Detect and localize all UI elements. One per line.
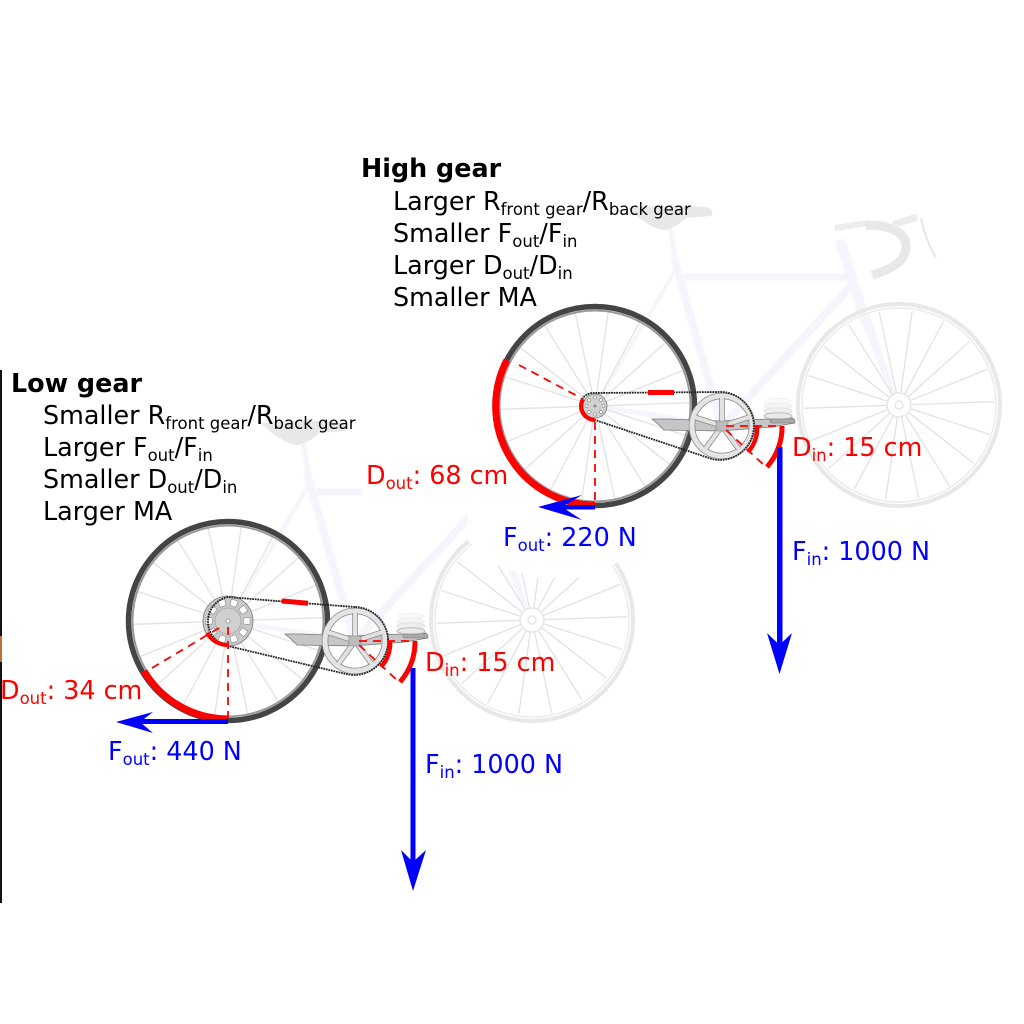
low gear output force arrow — [116, 712, 228, 733]
text block: low gear properties — [43, 400, 356, 526]
label: low gear D out: D — [0, 675, 20, 705]
high gear rear wheel — [496, 306, 694, 506]
label: high gear D out: out — [386, 474, 413, 493]
text block: low gear properties: out — [167, 478, 195, 497]
text block: low gear properties: Larger MA — [43, 496, 173, 526]
label: low gear F out: : 440 N — [150, 736, 242, 766]
text block: low gear properties: in — [222, 478, 237, 497]
label: high gear D out: D — [366, 460, 386, 490]
cover hiding the upper part of the low gear front wheel — [357, 430, 660, 578]
label: high gear F in: in — [807, 550, 822, 569]
high gear chain red mark — [648, 390, 674, 395]
high gear bike frame and front wheel — [595, 206, 1000, 506]
heading: low gear: Low gear — [11, 368, 142, 398]
high gear rear cog — [583, 394, 607, 418]
high gear rear wheel arcs — [496, 360, 595, 505]
label: low gear F in: in — [440, 763, 455, 782]
label: high gear D in: : 15 cm — [827, 432, 922, 462]
text block: high gear properties: /D — [530, 250, 558, 280]
label: high gear F in: F — [792, 536, 807, 566]
high gear chain — [580, 392, 754, 460]
high gear pedal distance marks — [726, 426, 782, 467]
text block: high gear properties: Larger R — [393, 186, 501, 216]
label: low gear F out: F — [108, 736, 123, 766]
label: low gear D out: out — [20, 689, 47, 708]
label: low gear D in: : 15 cm — [460, 647, 555, 677]
high gear bicycle — [496, 206, 1000, 674]
label: high gear D in: in — [812, 446, 827, 465]
low gear crankset — [285, 611, 428, 671]
low gear rear wheel arcs — [144, 633, 228, 719]
text block: low gear properties: /D — [194, 464, 222, 494]
text block: low gear properties: front gear — [165, 414, 248, 433]
label: high gear F in: : 1000 N — [822, 536, 930, 566]
label: high gear F out: : 220 N — [545, 522, 637, 552]
label: low gear D in: in — [445, 661, 460, 680]
label: high gear F out: F — [503, 522, 518, 552]
low gear rear distance dashes — [152, 625, 228, 718]
heading: high gear: High gear — [361, 153, 502, 183]
text block: high gear properties — [393, 186, 691, 312]
text block: high gear properties: /R — [583, 186, 609, 216]
text block: high gear properties: in — [562, 232, 578, 251]
low gear chain — [208, 597, 388, 675]
text block: low gear properties: out — [148, 446, 175, 465]
low gear bike frame and front wheel — [228, 421, 633, 721]
text block: low gear properties: back gear — [274, 414, 356, 433]
low gear chain red mark — [282, 601, 308, 603]
text block: high gear properties: front gear — [501, 200, 583, 219]
label: low gear D out: : 34 cm — [47, 675, 142, 705]
low gear rear wheel — [128, 522, 328, 720]
text block: low gear properties: in — [198, 446, 213, 465]
text block: high gear properties: Smaller F — [393, 218, 512, 248]
label: low gear F in: F — [425, 749, 440, 779]
label: high gear F out: out — [518, 536, 545, 555]
high gear crankset — [652, 396, 795, 456]
text block: low gear properties: /R — [247, 400, 274, 430]
text block: high gear properties: back gear — [609, 200, 691, 219]
text block: high gear properties: out — [502, 264, 530, 283]
text block: high gear properties: out — [512, 232, 540, 251]
text block: high gear properties: Larger D — [393, 250, 502, 280]
text block: high gear properties: Smaller MA — [393, 282, 538, 312]
low gear pedal distance marks — [359, 641, 415, 682]
text block: high gear properties: /F — [539, 218, 562, 248]
low gear input force arrow — [401, 668, 426, 891]
label: high gear D in: D — [792, 432, 812, 462]
low gear bicycle — [116, 421, 660, 891]
high gear input force arrow — [767, 447, 792, 674]
label: low gear F in: : 1000 N — [455, 749, 563, 779]
high gear rear distance dashes — [519, 365, 595, 503]
text block: low gear properties: Larger F — [43, 432, 148, 462]
text block: high gear properties: in — [558, 264, 573, 283]
text block: low gear properties: Smaller R — [43, 400, 165, 430]
label: low gear F out: out — [123, 750, 150, 769]
high gear output force arrow — [538, 495, 595, 520]
text block: low gear properties: /F — [175, 432, 198, 462]
label: low gear D in: D — [425, 647, 445, 677]
label: high gear D out: : 68 cm — [413, 460, 508, 490]
left edge line — [0, 370, 2, 903]
low gear rear cog — [203, 596, 253, 646]
text block: low gear properties: Smaller D — [43, 464, 167, 494]
